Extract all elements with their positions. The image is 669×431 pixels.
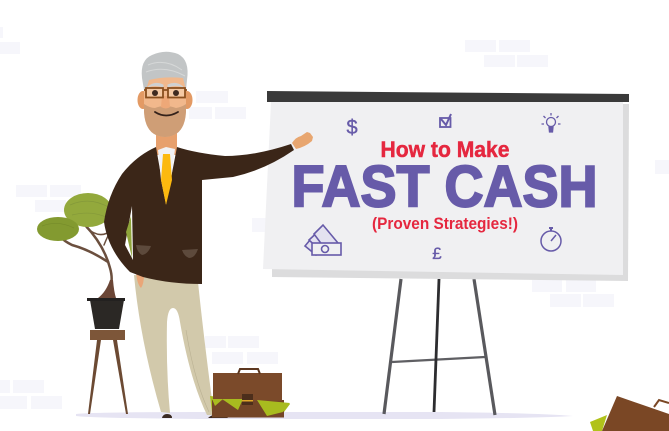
ears — [138, 91, 148, 109]
neck — [156, 125, 177, 155]
case lower — [212, 400, 284, 418]
money flaps — [212, 399, 290, 416]
jacket pockets — [136, 245, 198, 258]
foliage left — [37, 217, 79, 241]
pointing hand — [292, 132, 313, 149]
handle — [238, 369, 260, 374]
foliage top — [64, 193, 112, 227]
corner briefcase — [590, 396, 669, 431]
icon: checkbox — [440, 114, 451, 127]
beard stubble — [144, 104, 186, 137]
case flap — [213, 373, 282, 401]
clasp — [242, 394, 253, 405]
presentation board — [263, 91, 629, 281]
icon: banknotes — [305, 225, 341, 255]
briefcase with money — [210, 369, 290, 418]
title: How to Make: How to Make — [380, 137, 510, 162]
nose — [161, 96, 170, 108]
subtitle: Proven Strategies: (Proven Strategies!) — [372, 215, 518, 233]
easel legs — [384, 279, 495, 415]
glasses — [144, 88, 187, 98]
hair — [142, 52, 188, 90]
inner arm gap — [125, 206, 133, 260]
stool — [88, 330, 128, 414]
icon: dollar: $ — [346, 117, 358, 139]
board paper — [263, 102, 623, 275]
trousers — [134, 275, 214, 415]
icon: stopwatch — [541, 228, 561, 251]
hip hand — [136, 272, 144, 288]
floor shadow — [76, 412, 573, 419]
trunk and branches — [62, 215, 122, 297]
shoes — [162, 414, 228, 418]
mouth — [155, 112, 178, 116]
board shadow edge — [272, 104, 629, 281]
icon: light bulb — [542, 113, 560, 132]
eyes — [152, 90, 158, 96]
face — [144, 72, 186, 137]
eyebrows — [148, 83, 183, 87]
title: FAST CASH: FAST CASH — [292, 154, 598, 220]
presenter — [104, 52, 313, 418]
tie — [161, 154, 172, 205]
icon: pound: £ — [432, 244, 442, 263]
pot — [90, 300, 124, 329]
bonsai plant — [37, 193, 137, 414]
jacket and arms — [104, 144, 294, 284]
board top bar — [267, 91, 629, 102]
money — [210, 396, 290, 412]
shirt — [158, 147, 175, 204]
back foliage — [117, 200, 137, 230]
